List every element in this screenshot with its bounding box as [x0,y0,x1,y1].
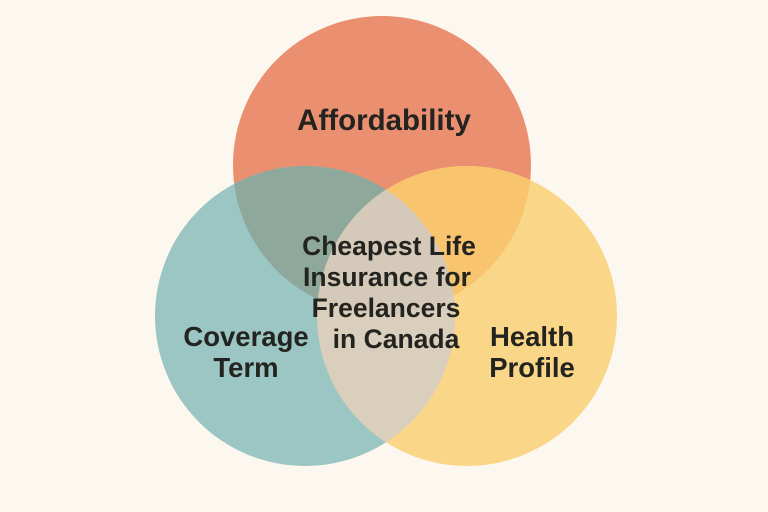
overlap: left-right [317,190,455,442]
label: center title: in Canada [333,324,460,354]
label: center title: Cheapest Life [302,231,476,261]
label: health profile: Profile [489,352,575,383]
label: affordability: Affordability [297,104,471,137]
circle: coverage term [155,166,455,466]
overlap: center [318,190,454,298]
label: center title: Freelancers [312,293,460,323]
circle: health profile [317,166,617,466]
overlap: top-right [318,166,530,298]
label: health profile: Health [490,321,574,352]
label: coverage term: Coverage [183,321,309,352]
circle: affordability [233,16,531,314]
label: coverage term: Term [213,352,279,383]
venn diagram [155,16,617,466]
label: center title: Insurance for [303,262,471,292]
overlap: top-left [234,166,386,298]
